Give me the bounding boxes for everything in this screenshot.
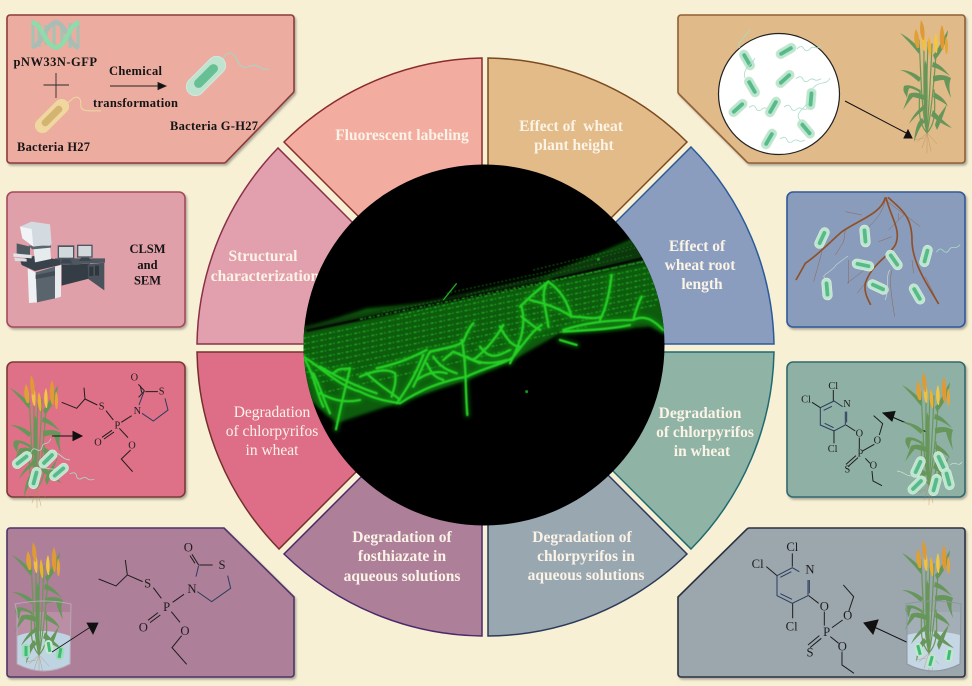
- chemical structure: fosthiazate: O: [128, 440, 136, 451]
- chemical structure: chlorpyrifos: Cl: [828, 444, 838, 455]
- chemical structure: chlorpyrifos large: P: [823, 625, 830, 639]
- panel: fosthiazate in aqueous solution: [7, 528, 294, 677]
- icon: bacteria culture circle: [718, 30, 840, 165]
- wedge label: of chlorpyrifos: [656, 424, 754, 441]
- chemical structure: chlorpyrifos: N: [843, 399, 851, 410]
- chemical structure: fosthiazate large: O: [139, 621, 148, 635]
- wedge: effect of wheat root length: [581, 147, 774, 344]
- icon: wheat in beaker: [902, 540, 961, 673]
- wedge label: length: [681, 276, 723, 293]
- wedge label: Effect of wheat: [519, 118, 624, 135]
- wedge label: aqueous solutions: [344, 568, 460, 585]
- wedge: fluorescent labeling: [284, 58, 482, 272]
- wedge label: Degradation of: [532, 529, 633, 546]
- wedge label: in wheat: [246, 442, 299, 459]
- chemical structure: chlorpyrifos large: Cl: [786, 540, 799, 554]
- chemical structure: fosthiazate large: O: [180, 624, 190, 638]
- chemical structure: fosthiazate: P: [114, 420, 120, 431]
- chemical structure: chlorpyrifos: S: [844, 465, 850, 476]
- wedge label: wheat root: [665, 257, 736, 274]
- chemical structure: fosthiazate: N: [134, 406, 142, 417]
- panel: wheat plant height: [678, 15, 965, 165]
- chemical structure: fosthiazate: O: [94, 437, 102, 448]
- wedge: degradation of chlorpyrifos in wheat, right: [580, 352, 774, 549]
- chemical structure: chlorpyrifos large: O: [820, 600, 829, 614]
- wedge label: Effect of: [669, 238, 726, 255]
- label: CLSM and SEM: and: [137, 258, 158, 272]
- wedge label: in wheat: [674, 443, 731, 460]
- label: Bacteria H27: Bacteria H27: [17, 140, 90, 154]
- chemical structure: chlorpyrifos: O: [856, 429, 864, 440]
- wedge label: characterization: [211, 268, 320, 285]
- wedge: degradation of fosthiazate: [284, 424, 482, 636]
- panel: CLSM and SEM: [7, 192, 185, 327]
- wedge label: Degradation of: [352, 529, 453, 546]
- icon: wheat: [900, 20, 952, 153]
- panel: fosthiazate in wheat: [7, 362, 185, 508]
- icon: wheat with bacteria: [897, 372, 962, 505]
- chemical structure: fosthiazate: S: [99, 401, 105, 412]
- wedge: degradation of chlorpyrifos in aqueous solutions: [488, 424, 687, 636]
- chemical structure: fosthiazate large: N: [187, 582, 197, 596]
- wedge label: Fluorescent labeling: [335, 127, 469, 144]
- panel: wheat root length: [787, 192, 965, 327]
- icon: wheat with bacteria: [10, 375, 97, 508]
- chemical structure: chlorpyrifos: O: [874, 435, 882, 446]
- wedge label: plant height: [534, 137, 615, 154]
- chemical structure: fosthiazate large: S: [144, 576, 151, 590]
- chemical structure: chlorpyrifos: O: [870, 460, 878, 471]
- label: Bacteria G-H27: Bacteria G-H27: [170, 119, 258, 133]
- chemical structure: fosthiazate large: [99, 541, 231, 664]
- icon: bacteria H27: [32, 96, 101, 136]
- chemical structure: chlorpyrifos large: O: [843, 609, 852, 623]
- chemical structure: chlorpyrifos large: O: [838, 640, 847, 654]
- chemical structure: chlorpyrifos large: Cl: [752, 557, 764, 571]
- wedge label: fosthiazate in: [358, 548, 447, 565]
- wedge label: aqueous solutions: [528, 567, 644, 584]
- icon: roots with bacteria: [796, 197, 962, 317]
- chemical structure: chlorpyrifos: [801, 381, 883, 486]
- arrow: transformation: [110, 82, 166, 90]
- chemical structure: chlorpyrifos: Cl: [828, 381, 838, 392]
- chemical structure: fosthiazate large: P: [163, 600, 170, 614]
- icon: wheat in beaker: [12, 542, 71, 675]
- panel: fluorescent labeling process: [7, 15, 294, 163]
- wedge label: Degradation: [659, 405, 742, 422]
- icon: plasmid DNA: [32, 21, 79, 49]
- chemical structure: chlorpyrifos: Cl: [801, 394, 811, 405]
- chemical structure: fosthiazate: O: [131, 372, 139, 383]
- chemical structure: chlorpyrifos large: [752, 540, 854, 673]
- icon: bacteria G-H27: [183, 53, 269, 99]
- chemical structure: fosthiazate large: O: [184, 541, 193, 555]
- chemical structure: fosthiazate: S: [159, 387, 165, 398]
- arrow: [52, 623, 98, 652]
- chemical structure: chlorpyrifos large: N: [805, 563, 815, 577]
- wedge: structural characterization: [197, 148, 388, 344]
- icon: microscope workstation: [13, 222, 105, 303]
- chemical structure: fosthiazate large: S: [218, 558, 226, 572]
- center: fluorescence micrograph of wheat root: [300, 164, 670, 526]
- chemical structure: chlorpyrifos large: S: [806, 645, 814, 659]
- arrow: [864, 620, 928, 652]
- label: CLSM and SEM: CLSM: [129, 242, 166, 256]
- label: CLSM and SEM: SEM: [134, 274, 161, 288]
- wedge label: Structural: [229, 248, 298, 265]
- icon: plus sign: [44, 73, 69, 98]
- panel: chlorpyrifos in aqueous solution: [678, 528, 965, 677]
- wedge label: of chlorpyrifos: [226, 423, 318, 440]
- wedge: degradation of chlorpyrifos in wheat, left: [197, 352, 389, 549]
- wedge label: Degradation: [234, 404, 311, 421]
- label: transformation: transformation: [93, 96, 178, 110]
- wedge: effect of wheat plant height: [488, 58, 687, 272]
- panel: chlorpyrifos in wheat: [787, 362, 965, 505]
- arrow: [883, 412, 929, 433]
- chemical structure: chlorpyrifos large: Cl: [786, 619, 798, 633]
- arrow: [845, 101, 912, 138]
- label: Chemical: Chemical: [109, 64, 163, 78]
- label: pNW33N-GFP: pNW33N-GFP: [14, 55, 97, 69]
- wedge label: chlorpyrifos in: [537, 548, 635, 565]
- chemical structure: fosthiazate: [62, 372, 168, 472]
- chemical structure: chlorpyrifos: P: [857, 449, 863, 460]
- arrow: [52, 432, 82, 440]
